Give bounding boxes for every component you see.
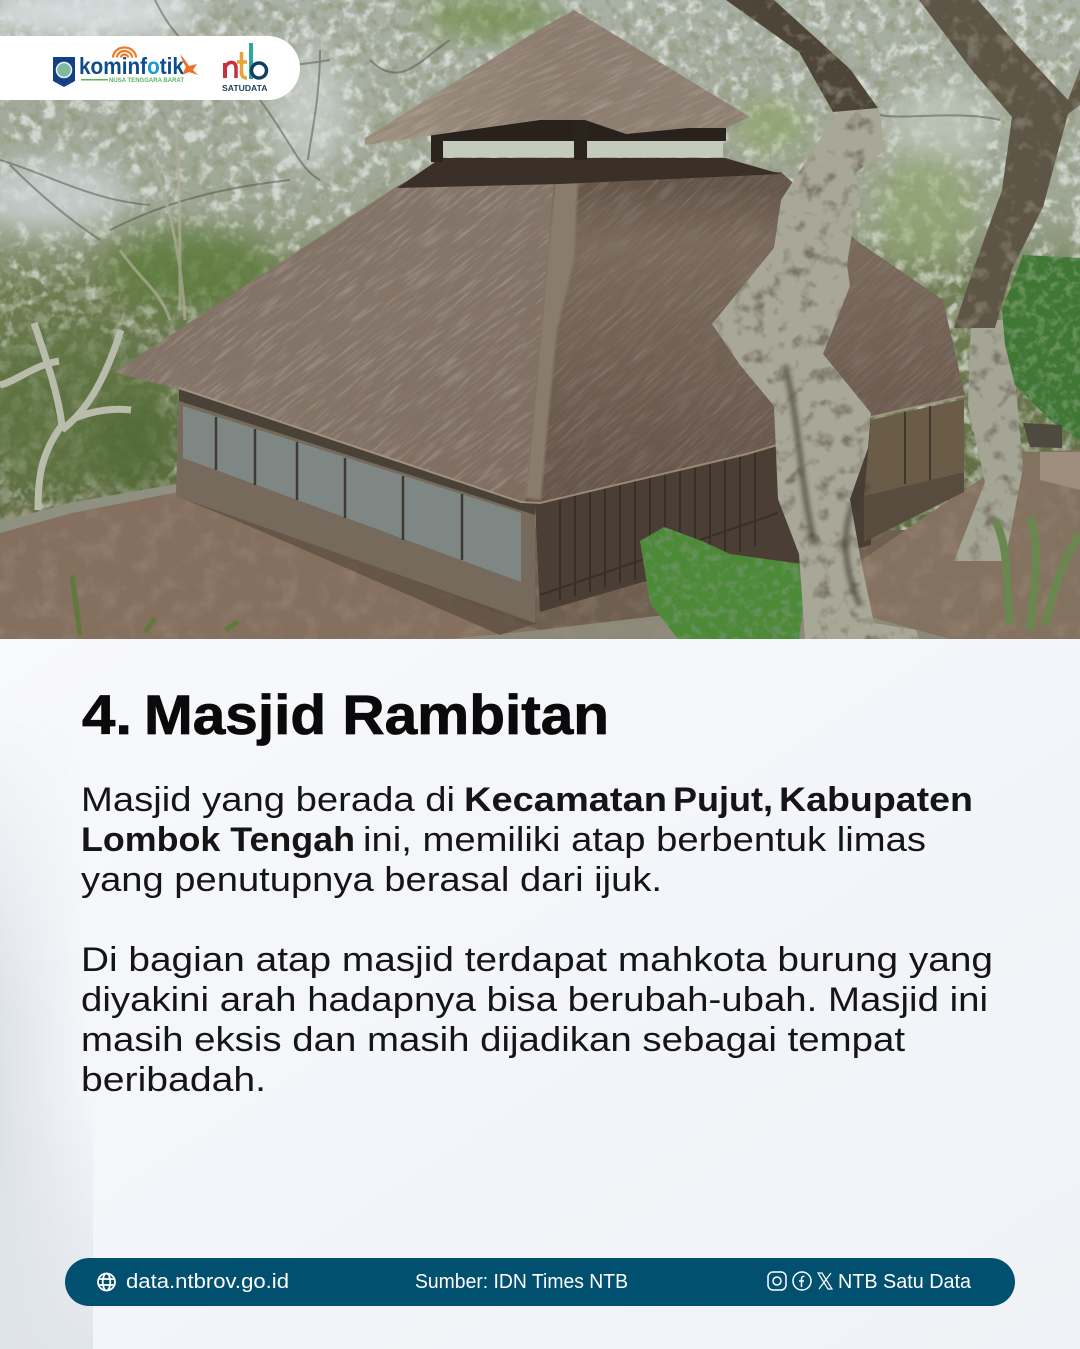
paragraph 1: Kabupaten (779, 781, 973, 819)
icon: orange deer (180, 54, 198, 75)
paragraph 2 (81, 941, 993, 1099)
icon: globe (98, 1274, 115, 1290)
source: Sumber: IDN Times NTB (415, 1271, 628, 1293)
social name: NTB Satu Data (838, 1271, 972, 1293)
kominfotik subtitle: NUSA TENGGARA BARAT (109, 77, 184, 84)
ground (0, 450, 1080, 639)
paragraph 1: Pujut, (673, 781, 773, 819)
ntb logo (225, 43, 266, 79)
paragraph 2: diyakini arah hadapnya bisa berubah-ubah. Masjid ini (81, 981, 988, 1019)
mosque walls (176, 389, 964, 623)
SATUDATA label: SATUDATA (222, 83, 268, 93)
paragraph 1: ini, memiliki atap berbentuk limas (363, 821, 926, 859)
photo background: foliage (0, 0, 1080, 639)
icon: X (818, 1273, 832, 1289)
photo: Masjid Rambitan with thatched roof among trees (0, 0, 1080, 639)
tree trunks (712, 0, 1080, 639)
icon: NTB province shield (53, 57, 75, 87)
icon: facebook (793, 1272, 811, 1290)
paragraph 2: beribadah. (81, 1061, 266, 1099)
footer bar (65, 1258, 1015, 1306)
paragraph 1: Masjid yang berada di (81, 781, 455, 819)
paragraph 1 (81, 781, 973, 899)
paragraph 1: Lombok Tengah (81, 821, 355, 859)
kominfotik divider (81, 79, 108, 80)
kominfotik logotype: kominfotik (79, 53, 184, 79)
paragraph 1: Kecamatan (464, 781, 667, 819)
logo pill (0, 36, 300, 100)
lower roof (114, 172, 965, 504)
icon: instagram (768, 1272, 786, 1290)
website: data.ntbrov.go.id (126, 1271, 289, 1293)
left tree branches (0, 323, 131, 510)
title: Masjid Rambitan (144, 683, 609, 746)
page background (0, 836, 93, 1349)
crown roof (365, 10, 780, 188)
paragraph 2: Di bagian atap masjid terdapat mahkota burung yang (81, 941, 993, 979)
paragraph 2: masih eksis dan masih dijadikan sebagai tempat (81, 1021, 906, 1059)
title: 4. (82, 683, 132, 746)
bush in front of mosque (640, 527, 809, 639)
paragraph 1: yang penutupnya berasal dari ijuk. (81, 861, 662, 899)
icon: wifi arcs (113, 48, 136, 58)
